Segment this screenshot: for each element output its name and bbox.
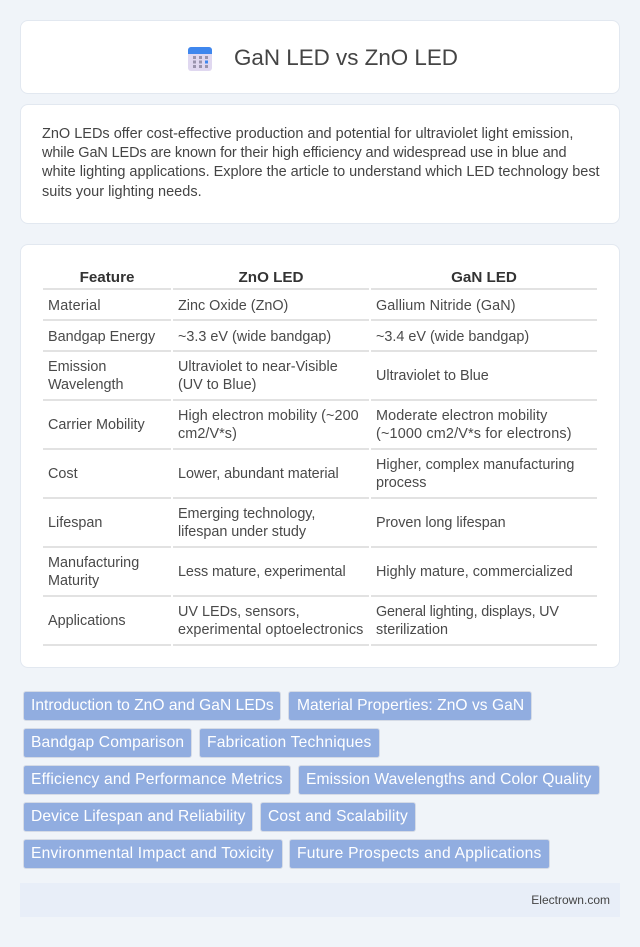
row: lifespan: Lifespan (48, 515, 102, 531)
footer credit: Electrown.com (531, 893, 610, 907)
topic tags (23, 691, 600, 869)
table header (80, 269, 517, 286)
row: applications: Applications (48, 613, 126, 629)
row: carrier mobility: High electron mobility (~200 (178, 408, 359, 424)
row: material: Gallium Nitride (GaN) (376, 298, 516, 314)
intro paragraph: suits your lighting needs. (42, 184, 202, 200)
row: material (48, 298, 516, 314)
footer bar (20, 883, 620, 917)
row: carrier mobility: (~1000 cm2/V*s for electrons) (376, 426, 572, 442)
row: applications: experimental optoelectronics (178, 622, 363, 638)
intro text panel (20, 104, 620, 224)
row: lifespan: Proven long lifespan (376, 515, 506, 531)
tag (23, 728, 192, 758)
title: GaN LED vs ZnO LED (234, 45, 458, 70)
row: manufacturing maturity (48, 555, 573, 589)
row: lifespan: Emerging technology, (178, 506, 315, 522)
row: emission wavelength: (UV to Blue) (178, 377, 256, 393)
tag: Environmental Impact and Toxicity (31, 845, 274, 862)
tag (260, 802, 416, 832)
title card (20, 20, 620, 94)
tag: Cost and Scalability (268, 808, 408, 825)
row: cost (48, 457, 574, 491)
tag: Material Properties: ZnO vs GaN (297, 697, 524, 714)
comparison table panel (20, 244, 620, 668)
row: lifespan: lifespan under study (178, 524, 306, 540)
table header: GaN LED (451, 269, 517, 286)
table header: Feature (80, 269, 134, 286)
tag: Efficiency and Performance Metrics (31, 771, 283, 788)
row: manufacturing maturity: Less mature, experimental (178, 564, 346, 580)
tag (298, 765, 600, 795)
row: manufacturing maturity: Maturity (48, 573, 99, 589)
row: emission wavelength (48, 359, 489, 393)
intro paragraph: ZnO LEDs offer cost-effective production and potential for ultraviolet light emission, (42, 126, 573, 142)
row: material: Material (48, 298, 101, 314)
row: carrier mobility: cm2/V*s) (178, 426, 237, 442)
row: emission wavelength: Emission (48, 359, 106, 375)
intro paragraph: white lighting applications. Explore the article to understand which LED technology best (42, 164, 600, 180)
tag: Device Lifespan and Reliability (31, 808, 246, 825)
row: emission wavelength: Ultraviolet to near-Visible (178, 359, 338, 375)
tag (289, 839, 550, 869)
row: applications: sterilization (376, 622, 448, 638)
row: cost: Cost (48, 466, 78, 482)
row: cost: process (376, 475, 426, 491)
row: bandgap energy: ~3.3 eV (wide bandgap) (178, 329, 331, 345)
row: carrier mobility: Carrier Mobility (48, 417, 145, 433)
tag (23, 691, 281, 721)
row: emission wavelength: Ultraviolet to Blue (376, 368, 489, 384)
tag (23, 765, 291, 795)
row: carrier mobility: Moderate electron mobility (376, 408, 547, 424)
row: bandgap energy (48, 329, 529, 345)
row: cost: Higher, complex manufacturing (376, 457, 574, 473)
row: carrier mobility (48, 408, 572, 442)
row: manufacturing maturity: Manufacturing (48, 555, 139, 571)
table header: ZnO LED (239, 269, 303, 286)
row: lifespan (48, 506, 506, 540)
tag (23, 802, 253, 832)
tag (199, 728, 380, 758)
icon: calendar grid (188, 47, 212, 71)
tag: Introduction to ZnO and GaN LEDs (31, 697, 274, 714)
intro paragraph (42, 126, 600, 200)
row: applications (48, 604, 559, 638)
tag: Bandgap Comparison (31, 734, 184, 751)
row: emission wavelength: Wavelength (48, 377, 123, 393)
row: applications: General lighting, displays, UV (376, 604, 559, 620)
row: manufacturing maturity: Highly mature, commercialized (376, 564, 573, 580)
tag: Emission Wavelengths and Color Quality (306, 771, 591, 788)
tag (23, 839, 283, 869)
intro paragraph: while GaN LEDs are known for their high efficiency and widespread use in blue and (42, 145, 566, 161)
tag: Future Prospects and Applications (297, 845, 542, 862)
tag (288, 691, 532, 721)
row: cost: Lower, abundant material (178, 466, 339, 482)
row: bandgap energy: Bandgap Energy (48, 329, 155, 345)
row: applications: UV LEDs, sensors, (178, 604, 300, 620)
row: material: Zinc Oxide (ZnO) (178, 298, 288, 314)
tag: Fabrication Techniques (207, 734, 371, 751)
row: bandgap energy: ~3.4 eV (wide bandgap) (376, 329, 529, 345)
